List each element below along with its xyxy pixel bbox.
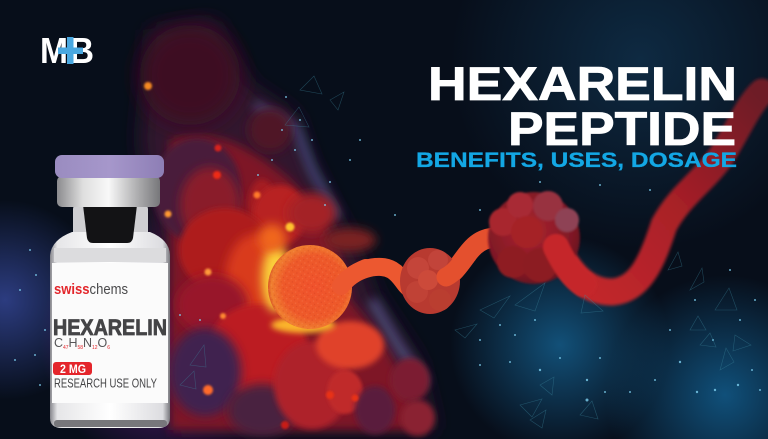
vial base — [54, 420, 167, 427]
vial stopper — [83, 205, 137, 243]
formula: C — [54, 336, 63, 350]
illustration: tissue mass — [140, 20, 435, 436]
dose badge — [53, 362, 92, 376]
peptide ball — [268, 245, 366, 329]
glow: yellow contact — [262, 244, 290, 312]
product name: HEXARELIN — [53, 315, 167, 340]
formula: 12 — [92, 345, 98, 351]
title: HEXARELIN — [428, 57, 737, 110]
formula: N — [83, 336, 92, 350]
research note: RESEARCH USE ONLY — [54, 376, 157, 390]
dose badge: 2 MG — [60, 364, 86, 376]
peptide stem: small to large cluster — [446, 238, 492, 277]
peptide cluster: small — [400, 248, 468, 314]
vial cap — [55, 155, 164, 178]
title: PEPTIDE — [508, 102, 736, 155]
product vial — [50, 155, 170, 428]
formula: 47 — [63, 345, 69, 351]
vial neck — [73, 205, 148, 239]
decorative particles — [14, 96, 761, 402]
title — [416, 57, 737, 172]
formula: 58 — [78, 345, 83, 351]
vial label — [52, 263, 168, 403]
logo: MHB: M — [40, 30, 68, 71]
brand: swisschems — [54, 281, 128, 298]
illustration: peptide chain — [268, 92, 762, 329]
formula: O — [98, 336, 108, 350]
logo: MHB — [40, 30, 94, 71]
peptide stem: ball to small cluster — [341, 267, 412, 290]
peptide cluster: large — [488, 191, 584, 284]
vial crimp — [57, 176, 160, 207]
vial shoulder shading — [54, 248, 166, 262]
vial body — [50, 232, 170, 428]
logo: MHB: B — [70, 30, 94, 71]
formula: H — [69, 336, 78, 350]
peptide tail — [556, 92, 762, 292]
subtitle: BENEFITS, USES, DOSAGE — [416, 149, 737, 172]
formula: 6 — [107, 345, 110, 351]
